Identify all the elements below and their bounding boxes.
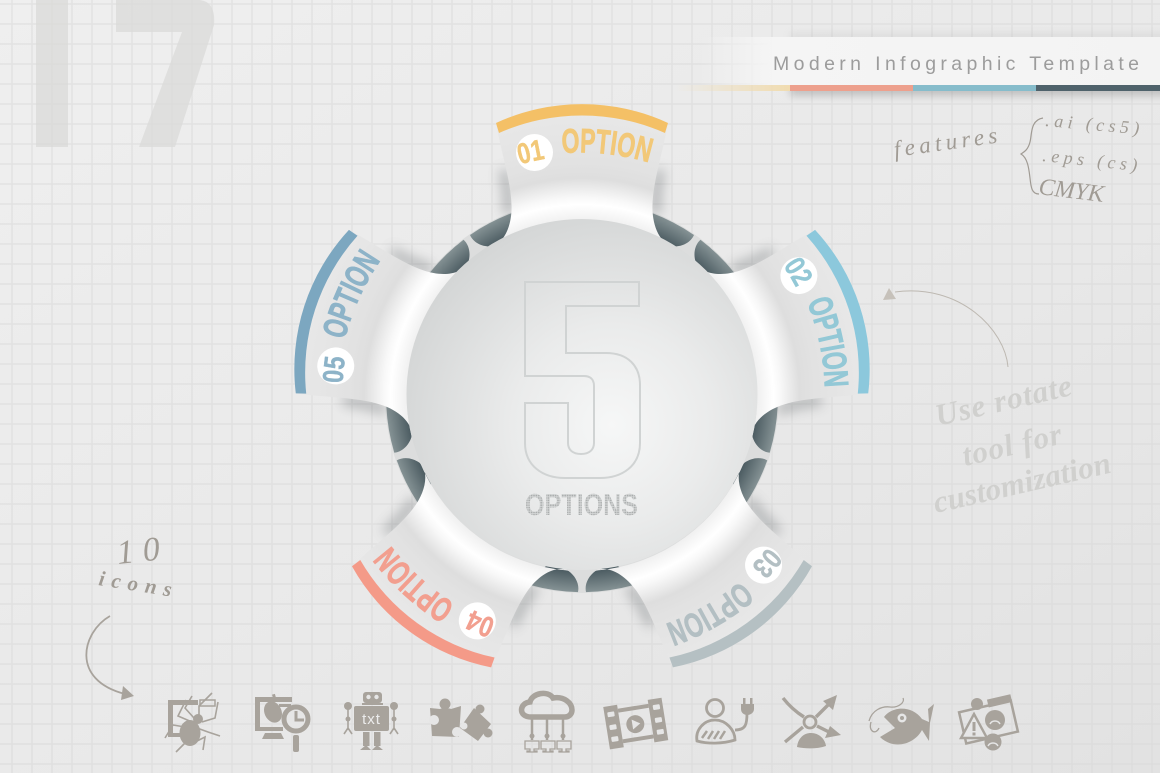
icon: spider on browser	[165, 693, 220, 752]
rotate note: customization	[930, 445, 1114, 520]
features note: .ai (cs5)	[1045, 110, 1145, 140]
big outlined 5	[525, 282, 640, 478]
options label: OPTIONS	[525, 487, 638, 522]
icon: puzzle pieces	[429, 698, 492, 741]
features note: features	[892, 122, 1003, 162]
brace	[1021, 118, 1043, 194]
option 03 tab: OPTION	[666, 584, 752, 646]
icon: alert browser	[958, 694, 1019, 750]
10 icons note: 10	[115, 530, 171, 572]
option 01 tab	[470, 104, 694, 246]
option 01 tab: OPTION	[562, 128, 654, 162]
icon: robot txt: txt	[362, 711, 381, 728]
option 01 tab: 01	[517, 140, 545, 164]
features note: .eps (cs)	[1041, 145, 1143, 176]
centre sphere	[406, 219, 758, 570]
arrow	[86, 616, 134, 700]
option 02 tab	[694, 230, 870, 453]
arrow	[883, 288, 1008, 367]
icon row	[165, 692, 1019, 752]
template number 17	[36, 0, 214, 147]
icon: robot txt	[344, 692, 398, 750]
rotate note	[883, 288, 1114, 520]
option 03 tab: 03	[753, 550, 781, 578]
icon: film strip	[603, 698, 668, 749]
option 05 tab: OPTION	[323, 248, 380, 337]
icon: cloud network	[522, 693, 572, 752]
colour stripe	[675, 85, 1160, 91]
base ring	[385, 199, 779, 593]
title: Modern Infographic Template	[773, 53, 1139, 75]
rotate note: tool for	[959, 416, 1066, 473]
rotate note: Use rotate	[932, 367, 1076, 433]
features note	[892, 110, 1145, 208]
radial diagram	[294, 104, 870, 668]
option 05 tab	[294, 230, 470, 453]
option 04 tab: 04	[466, 610, 494, 637]
icon: split arrows	[783, 695, 841, 748]
option 02 tab: OPTION	[809, 297, 849, 386]
icon: fish and hook	[869, 698, 934, 744]
icon: bug search	[255, 694, 308, 752]
option 02 tab: 02	[785, 258, 812, 288]
option 04 tab	[352, 458, 578, 668]
option 04 tab: OPTION	[372, 546, 452, 621]
option 03 tab	[586, 458, 812, 668]
features note: CMYK	[1037, 174, 1107, 208]
10 icons note	[86, 530, 180, 700]
header banner	[675, 33, 1160, 96]
option 05 tab: 05	[322, 356, 345, 382]
icon: person with plug	[697, 698, 754, 743]
10 icons note: icons	[97, 566, 180, 603]
